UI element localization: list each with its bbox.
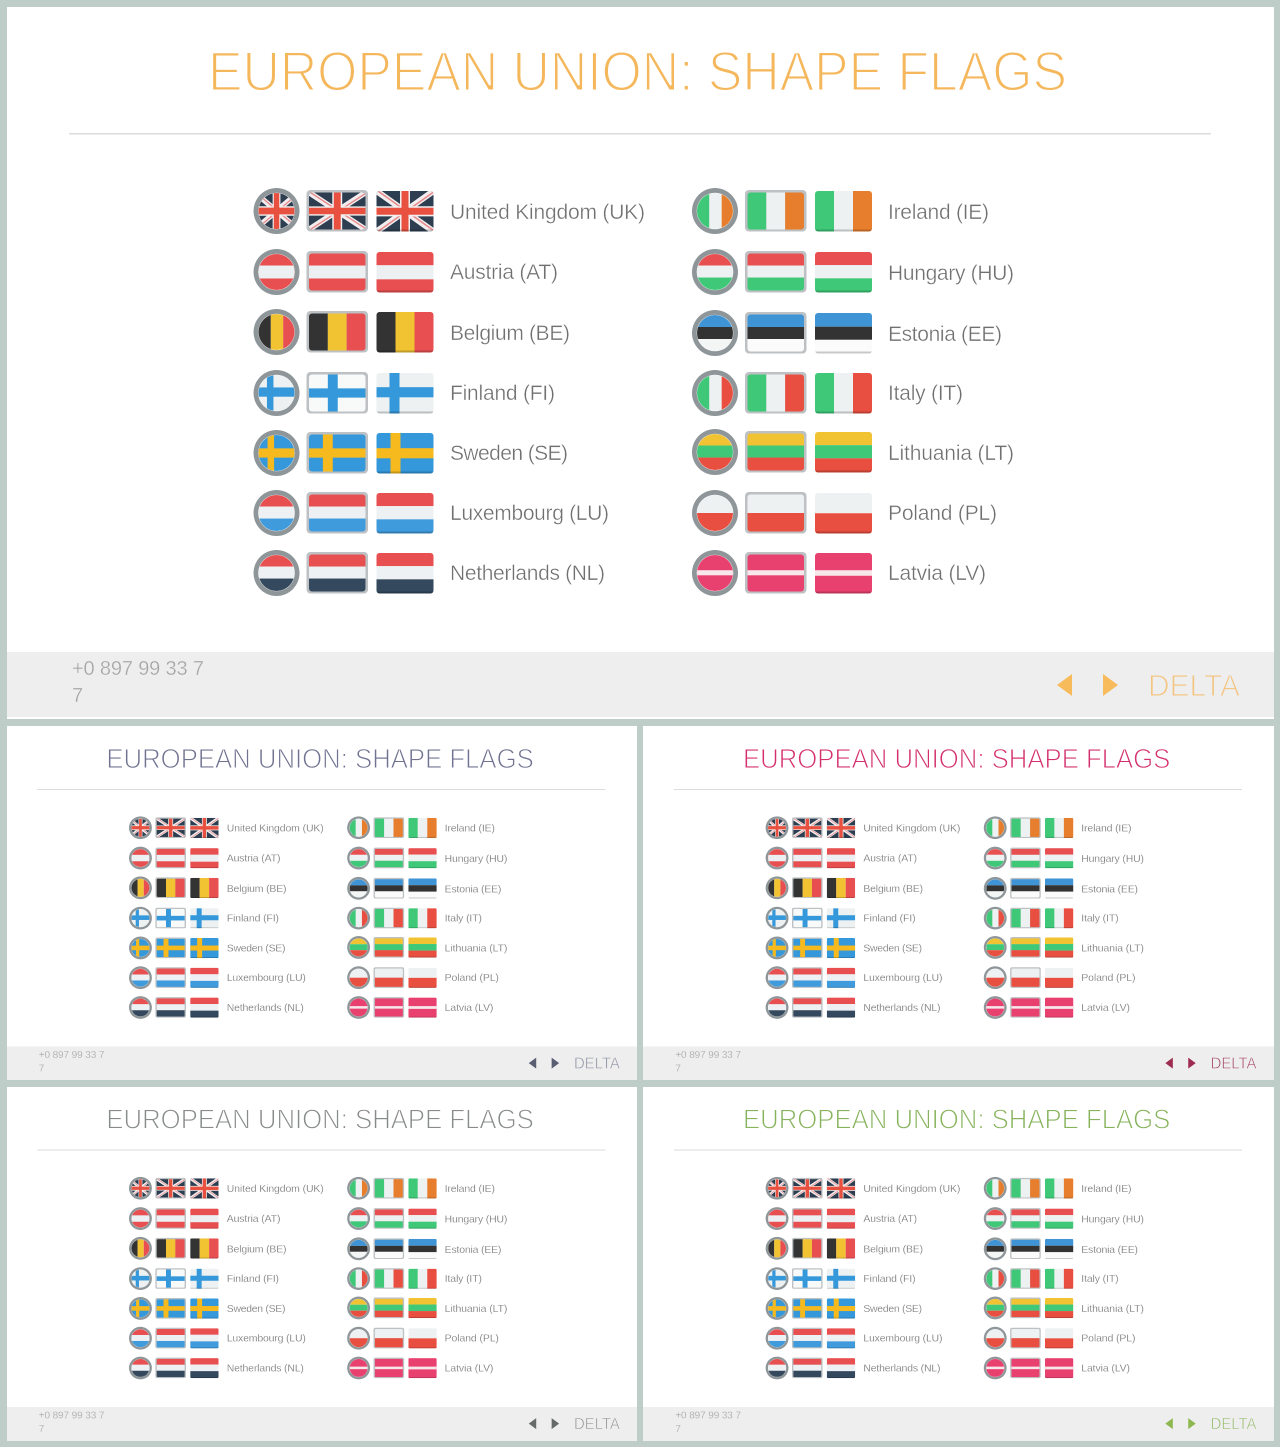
flag grid: [254, 188, 872, 596]
country labels: Hungary (HU): [445, 854, 507, 865]
country labels: Poland (PL): [888, 502, 997, 525]
phone number second line: 7: [39, 1064, 45, 1075]
country labels: Hungary (HU): [1081, 854, 1144, 865]
country labels: Austria (AT): [863, 854, 917, 865]
country labels: Lithuania (LT): [888, 442, 1014, 465]
country labels: Poland (PL): [445, 1334, 499, 1345]
panel: slate variant: [7, 726, 637, 1080]
country labels: Ireland (IE): [445, 824, 495, 835]
country labels: Belgium (BE): [863, 884, 923, 895]
country labels: United Kingdom (UK): [863, 824, 960, 835]
country labels: Sweden (SE): [227, 943, 285, 954]
country labels: Lithuania (LT): [1081, 1304, 1144, 1315]
phone number: +0 897 99 33 7: [39, 1050, 105, 1061]
country labels: Estonia (EE): [445, 884, 501, 895]
country labels: United Kingdom (UK): [863, 1184, 960, 1195]
country labels: Lithuania (LT): [445, 1304, 507, 1315]
phone number: +0 897 99 33 7: [675, 1411, 741, 1422]
country labels: [863, 1184, 1144, 1374]
country labels: Italy (IT): [445, 914, 482, 925]
country labels: Ireland (IE): [888, 201, 989, 224]
panel: green variant: [643, 1087, 1274, 1441]
slide content: [37, 1103, 621, 1435]
phone number: +0 897 99 33 7: [72, 658, 204, 680]
country labels: United Kingdom (UK): [227, 1184, 324, 1195]
country labels: Hungary (HU): [1081, 1215, 1144, 1226]
navigation arrows: [529, 1058, 559, 1069]
title: EUROPEAN UNION: SHAPE FLAGS: [106, 1103, 534, 1134]
country labels: Belgium (BE): [450, 322, 570, 345]
country labels: Finland (FI): [227, 914, 279, 925]
country labels: Estonia (EE): [1081, 884, 1138, 895]
phone number second line: 7: [675, 1424, 681, 1435]
flag grid: [766, 1177, 1073, 1379]
country labels: Estonia (EE): [888, 323, 1002, 346]
country labels: [227, 1184, 507, 1374]
country labels: Italy (IT): [1081, 914, 1119, 925]
title: EUROPEAN UNION: SHAPE FLAGS: [743, 1103, 1170, 1134]
brand DELTA: DELTA: [1211, 1416, 1257, 1433]
flag grid: [766, 816, 1073, 1019]
country labels: Netherlands (NL): [227, 1363, 304, 1374]
country labels: Estonia (EE): [445, 1245, 501, 1256]
country labels: Latvia (LV): [888, 562, 986, 585]
country labels: Luxembourg (LU): [227, 973, 306, 984]
phone number: +0 897 99 33 7: [39, 1411, 105, 1422]
country labels: Belgium (BE): [227, 884, 286, 895]
slide content: [37, 743, 621, 1075]
country labels: Italy (IT): [1081, 1274, 1119, 1285]
country labels: Finland (FI): [450, 382, 555, 405]
country labels: [863, 824, 1144, 1014]
title: EUROPEAN UNION: SHAPE FLAGS: [106, 743, 534, 774]
phone number second line: 7: [72, 685, 83, 707]
country labels: Hungary (HU): [888, 262, 1014, 285]
country labels: Luxembourg (LU): [863, 973, 942, 984]
country labels: Ireland (IE): [445, 1184, 495, 1195]
brand DELTA: DELTA: [574, 1416, 621, 1433]
navigation arrows: [1057, 674, 1118, 696]
country labels: Luxembourg (LU): [227, 1334, 306, 1345]
country labels: Italy (IT): [445, 1274, 482, 1285]
country labels: [227, 824, 507, 1014]
country labels: Netherlands (NL): [227, 1003, 304, 1014]
country labels: Italy (IT): [888, 382, 963, 405]
country labels: Austria (AT): [450, 261, 558, 284]
country labels: Finland (FI): [863, 1274, 916, 1285]
country labels: Netherlands (NL): [863, 1003, 940, 1014]
country labels: Belgium (BE): [863, 1244, 923, 1255]
title: EUROPEAN UNION: SHAPE FLAGS: [743, 743, 1170, 774]
country labels: Poland (PL): [445, 973, 499, 984]
country labels: Austria (AT): [863, 1214, 917, 1225]
slide content: [674, 1103, 1257, 1435]
country labels: [450, 201, 1014, 585]
country labels: United Kingdom (UK): [227, 824, 324, 835]
country labels: Estonia (EE): [1081, 1245, 1138, 1256]
country labels: Luxembourg (LU): [863, 1334, 942, 1345]
country labels: Latvia (LV): [1081, 1363, 1130, 1374]
country labels: Ireland (IE): [1081, 824, 1132, 835]
country labels: Sweden (SE): [863, 1304, 922, 1315]
country labels: Sweden (SE): [863, 943, 922, 954]
brand DELTA: DELTA: [574, 1056, 621, 1073]
country labels: Finland (FI): [863, 914, 916, 925]
phone number second line: 7: [39, 1424, 45, 1435]
country labels: Netherlands (NL): [450, 562, 605, 585]
country labels: Poland (PL): [1081, 973, 1136, 984]
panel: pink variant: [643, 726, 1274, 1080]
country labels: Austria (AT): [227, 854, 281, 865]
navigation arrows: [1165, 1058, 1196, 1069]
panel: grey variant: [7, 1087, 637, 1441]
brand DELTA: DELTA: [1148, 668, 1240, 703]
country labels: United Kingdom (UK): [450, 201, 645, 224]
country labels: Finland (FI): [227, 1274, 279, 1285]
country labels: Lithuania (LT): [1081, 943, 1144, 954]
navigation arrows: [1165, 1418, 1196, 1429]
slide content: [674, 743, 1257, 1075]
flag grid: [129, 1177, 437, 1379]
country labels: Lithuania (LT): [445, 943, 507, 954]
phone number second line: 7: [675, 1064, 681, 1075]
navigation arrows: [529, 1418, 559, 1429]
country labels: Belgium (BE): [227, 1244, 286, 1255]
flag grid: [129, 816, 437, 1019]
country labels: Ireland (IE): [1081, 1184, 1132, 1195]
panel: main slide orange: [7, 7, 1274, 719]
title: EUROPEAN UNION: SHAPE FLAGS: [208, 40, 1067, 102]
country labels: Sweden (SE): [450, 442, 568, 465]
country labels: Poland (PL): [1081, 1334, 1136, 1345]
brand DELTA: DELTA: [1211, 1056, 1257, 1073]
country labels: Austria (AT): [227, 1214, 281, 1225]
country labels: Hungary (HU): [445, 1215, 507, 1226]
country labels: Latvia (LV): [445, 1363, 493, 1374]
phone number: +0 897 99 33 7: [675, 1050, 741, 1061]
country labels: Netherlands (NL): [863, 1363, 940, 1374]
country labels: Latvia (LV): [445, 1003, 493, 1014]
country labels: Sweden (SE): [227, 1304, 285, 1315]
country labels: Luxembourg (LU): [450, 502, 609, 525]
country labels: Latvia (LV): [1081, 1003, 1130, 1014]
